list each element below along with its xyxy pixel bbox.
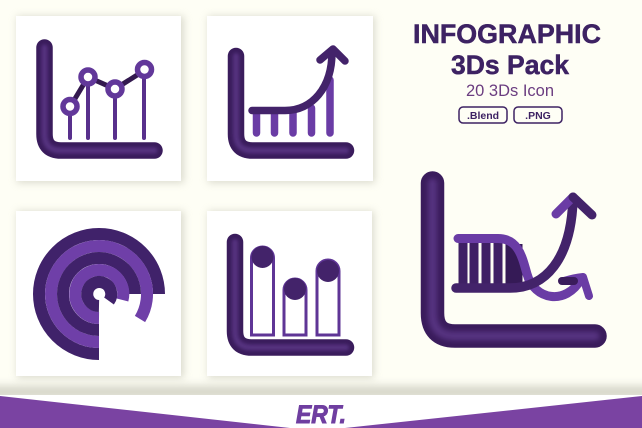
icon: large chart axes: [432, 183, 595, 336]
panel: growth arrow card: [207, 16, 375, 183]
icon: bar one: [252, 246, 274, 335]
icon: growth curve arrow: [252, 52, 332, 110]
icon: large chart bars: [463, 241, 498, 285]
icon: large double arrow chart: [432, 183, 595, 336]
icon: bar three: [317, 260, 339, 335]
heading: INFOGRAPHIC: INFOGRAPHIC: [413, 19, 601, 49]
panel: footer band: [0, 395, 642, 428]
icon: upper dark curve arrow: [456, 199, 573, 288]
panel: radial chart card: [16, 211, 184, 378]
right purple wedge: [345, 396, 642, 428]
icon: growth chart bars: [256, 80, 330, 133]
badge: .Blend: [459, 107, 507, 123]
badge: .PNG: .PNG: [525, 110, 551, 122]
panel: rounded bars card: [207, 211, 374, 378]
icon: line chart axes: [44, 48, 154, 150]
icon: bar two: [284, 278, 306, 335]
icon: radial chart rings: [39, 234, 159, 354]
panel: line chart card: [16, 16, 184, 183]
badge: .Blend: .Blend: [467, 110, 499, 122]
badge: .PNG: [514, 107, 562, 123]
icon: line chart stems and points: [63, 62, 152, 138]
text: 20 3Ds Icon: 20 3Ds Icon: [466, 82, 554, 100]
icon: lower purple curve arrow: [458, 238, 581, 297]
heading: 3Ds Pack: 3Ds Pack: [451, 50, 570, 80]
footer shadow: [0, 387, 642, 397]
left purple wedge: [0, 396, 290, 428]
icon: rounded bars axes: [235, 242, 346, 348]
icon: growth chart axes: [236, 56, 346, 150]
